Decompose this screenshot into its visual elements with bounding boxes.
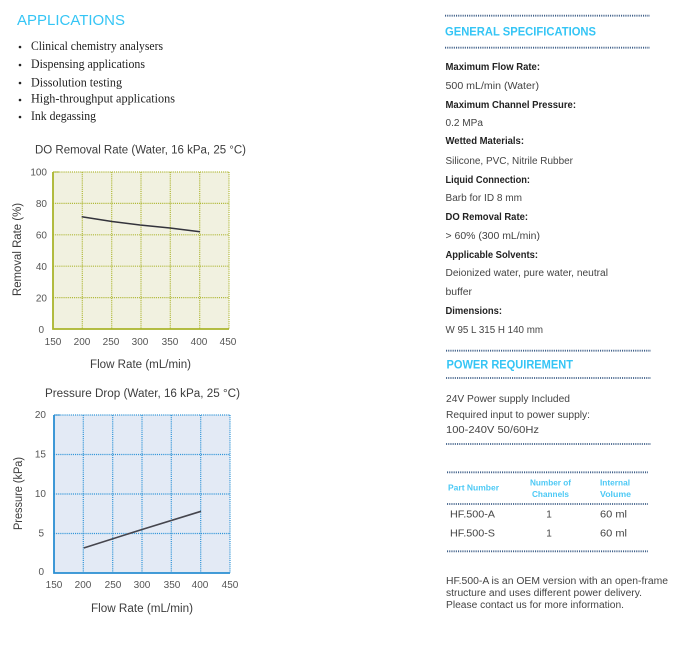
table header: Volume	[600, 489, 631, 499]
panel: applications	[17, 13, 175, 123]
note: Please contact us for more information.	[446, 600, 624, 611]
x axis ticks: 350	[164, 580, 181, 591]
data line	[82, 217, 200, 232]
note	[446, 576, 668, 611]
spec list: DO Removal Rate:	[446, 212, 528, 223]
y axis ticks: 15	[35, 450, 46, 460]
list: applications: Clinical chemistry analysers	[31, 38, 163, 53]
chart: DO removal rate	[12, 144, 246, 371]
spec list: Wetted Materials:	[446, 136, 524, 147]
x axis ticks: 200	[74, 337, 91, 348]
x axis ticks: 400	[191, 337, 208, 348]
table header: Internal	[600, 478, 630, 488]
heading: power requirement: POWER REQUIREMENT	[446, 358, 574, 372]
table header: Channels	[532, 489, 569, 499]
x axis ticks: 250	[105, 580, 122, 591]
x axis ticks: 450	[220, 337, 237, 348]
y axis ticks	[35, 410, 46, 578]
table header: Part Number	[448, 483, 500, 493]
power text: 100-240V 50/60Hz	[446, 425, 539, 436]
y axis ticks: 60	[36, 230, 47, 242]
x axis ticks	[45, 337, 237, 348]
heading: general specifications: GENERAL SPECIFICATIONS	[445, 25, 596, 39]
chart title: Pressure Drop (Water, 16 kPa, 25 °C)	[45, 388, 240, 400]
power text: 24V Power supply Included	[446, 394, 570, 405]
table row: HF.500-S: 1	[546, 529, 552, 540]
panel: power requirement	[446, 351, 651, 444]
power text: Required input to power supply:	[446, 410, 590, 421]
table row: HF.500-S	[450, 529, 627, 540]
list: applications: Dispensing applications	[31, 56, 145, 71]
y axis label: Pressure (kPa)	[13, 457, 25, 530]
table row: HF.500-A	[450, 510, 627, 521]
power text	[446, 394, 590, 436]
table row: HF.500-A: HF.500-A	[450, 510, 495, 521]
y axis ticks: 20	[36, 294, 47, 304]
x axis ticks: 150	[46, 580, 63, 591]
spec list: 500 mL/min (Water)	[446, 81, 539, 92]
list: applications: Dissolution testing	[31, 74, 122, 90]
x axis label: Flow Rate (mL/min)	[90, 359, 191, 371]
spec list: Barb for ID 8 mm	[446, 193, 522, 204]
note: structure and uses different power delivery.	[446, 588, 642, 599]
x axis ticks: 450	[222, 580, 239, 591]
spec list: > 60% (300 mL/min)	[446, 231, 540, 242]
y axis ticks: 0	[38, 567, 44, 578]
x axis ticks: 250	[103, 337, 120, 348]
x axis ticks: 400	[192, 580, 209, 591]
list: applications: High-throughput applications	[31, 90, 175, 106]
x axis ticks: 300	[132, 337, 149, 348]
table row: HF.500-A: 60 ml	[600, 510, 627, 521]
chart: pressure drop	[13, 388, 240, 615]
spec list: Dimensions:	[446, 306, 502, 317]
x axis ticks: 200	[75, 580, 92, 591]
spec list: Liquid Connection:	[446, 175, 530, 186]
y axis ticks: 5	[38, 528, 44, 540]
table row: HF.500-S: HF.500-S	[450, 529, 495, 540]
y axis ticks: 10	[35, 489, 46, 500]
x axis ticks	[46, 580, 239, 591]
spec list: Applicable Solvents:	[446, 250, 538, 261]
note: HF.500-A is an OEM version with an open-frame	[446, 576, 668, 587]
data line	[84, 511, 201, 548]
list: applications: Ink degassing	[31, 108, 96, 123]
heading: applications: APPLICATIONS	[17, 13, 125, 29]
y axis ticks: 20	[35, 410, 46, 421]
spec list: 0.2 MPa	[446, 118, 483, 129]
x axis ticks: 300	[134, 580, 151, 591]
table row: HF.500-A: 1	[546, 510, 552, 521]
list: applications	[19, 38, 175, 123]
x axis ticks: 150	[45, 337, 62, 348]
spec list: Maximum Channel Pressure:	[446, 100, 576, 111]
y axis ticks: 40	[36, 262, 47, 273]
x axis ticks: 350	[162, 337, 179, 348]
y axis ticks	[30, 168, 47, 336]
y axis ticks: 80	[36, 199, 47, 210]
chart title: DO Removal Rate (Water, 16 kPa, 25 °C)	[35, 144, 246, 156]
y axis label: Removal Rate (%)	[12, 203, 24, 296]
y axis ticks: 0	[38, 325, 44, 336]
x axis label: Flow Rate (mL/min)	[91, 603, 193, 615]
table header	[448, 478, 631, 499]
spec list: buffer	[446, 287, 473, 298]
spec list: Maximum Flow Rate:	[446, 62, 540, 73]
table header: Number of	[530, 478, 571, 488]
spec list	[446, 62, 608, 336]
spec list: Deionized water, pure water, neutral	[446, 268, 608, 279]
y axis ticks: 100	[30, 168, 47, 178]
spec list: Silicone, PVC, Nitrile Rubber	[446, 156, 574, 167]
spec list: W 95 L 315 H 140 mm	[446, 325, 543, 336]
table row: HF.500-S: 60 ml	[600, 529, 627, 540]
table: part numbers	[447, 472, 648, 551]
panel: general specifications	[445, 16, 650, 336]
